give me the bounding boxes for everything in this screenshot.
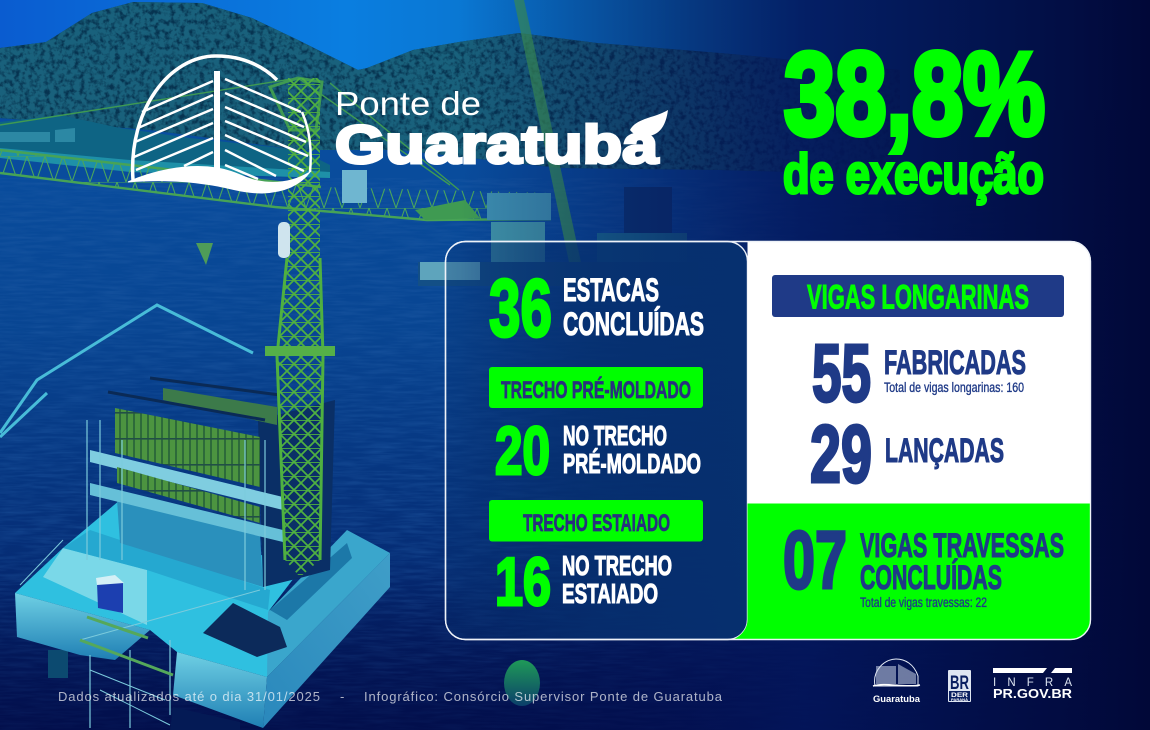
blue cabin (97, 583, 123, 613)
logo emblem: cable-stayed bridge (128, 56, 311, 193)
footer credits: Infográfico: Consórcio Supervisor Ponte de Guaratuba (364, 689, 723, 704)
stat: 20 no trecho pré-moldado (495, 413, 701, 489)
footer logo: Ponte de Guaratuba (873, 659, 921, 704)
stat: 07 vigas travessas concluídas: Total de vigas travessas: 22 (860, 595, 987, 610)
lower front wall (173, 652, 267, 728)
footer logo: DER Paraná: DER (951, 693, 969, 699)
label: trecho estaiado: TRECHO ESTAIADO (523, 510, 670, 537)
tower block and barge (624, 187, 672, 233)
formwork (115, 408, 260, 487)
tower lower face (117, 500, 263, 587)
stat: 36 estacas concluídas (489, 263, 704, 354)
stat: 55 fabricadas (812, 328, 1026, 419)
scaffold (87, 420, 265, 728)
hills (0, 0, 900, 180)
footer logo: DER Paraná: PARANÁ (951, 697, 969, 702)
headline percentage: 38,8% (784, 28, 1045, 159)
footer logo: Infra PR.GOV.BR: INFRA (993, 677, 1072, 689)
green beams (80, 617, 173, 675)
label: trecho pré-moldado (489, 367, 703, 408)
left wall (15, 593, 150, 660)
shore buildings (0, 115, 330, 178)
green buoy (504, 660, 540, 706)
bottom shading (0, 560, 1150, 730)
bands (90, 450, 283, 510)
panel: vigas longarinas (748, 241, 1091, 504)
project logo (128, 56, 668, 193)
stat: 55 fabricadas: FABRICADAS (884, 344, 1026, 382)
stat: 36 estacas concluídas: 36 (489, 263, 552, 354)
stat: 16 no trecho estaiado (495, 544, 672, 620)
main deck (15, 500, 300, 677)
logo wordmark: Ponte de: Ponte de (335, 85, 481, 122)
stat: 55 fabricadas: Total de vigas longarinas: 160 (884, 380, 1024, 395)
heading: vigas longarinas (772, 275, 1064, 317)
stat: 29 lançadas: LANÇADAS (885, 432, 1004, 470)
heading: vigas longarinas: VIGAS LONGARINAS (807, 278, 1029, 316)
tarp (203, 603, 287, 657)
crane apex and tower (270, 78, 322, 130)
stat: 16 no trecho estaiado: 16 (495, 544, 551, 620)
footer logo: Ponte de Guaratuba: Guaratuba (873, 694, 921, 704)
footer credits (58, 689, 723, 704)
panel outline (446, 242, 1090, 640)
stat: 20 no trecho pré-moldado: PRÉ-MOLDADO (563, 448, 701, 479)
stat: 29 lançadas: 29 (810, 409, 872, 500)
footer logo: Infra PR.GOV.BR (993, 668, 1073, 701)
logo wordmark: Guaratuba: Guaratuba (335, 115, 659, 175)
panel: estacas (446, 242, 748, 640)
stat: 20 no trecho pré-moldado: 20 (495, 413, 550, 489)
crane ties (0, 78, 459, 190)
stat: 16 no trecho estaiado: NO TRECHO (562, 550, 672, 581)
stat: 29 lançadas (810, 409, 1004, 500)
dark side behind crane tower (258, 400, 335, 587)
tower crane mast (265, 258, 335, 577)
footer credits: Dados atualizados até o dia 31/01/2025 (58, 689, 320, 704)
panel: vigas travessas (732, 504, 1091, 640)
concrete pump boom (0, 305, 253, 437)
stat: 36 estacas concluídas: CONCLUÍDAS (563, 306, 704, 342)
footer logo: Infra PR.GOV.BR: PR.GOV.BR (993, 686, 1073, 701)
stat: 07 vigas travessas concluídas: 07 (783, 515, 847, 606)
headline subtitle: de execução (783, 142, 1044, 205)
dark void (170, 707, 240, 730)
label: trecho pré-moldado: TRECHO PRÉ-MOLDADO (501, 376, 691, 404)
footer logo: DER Paraná (948, 670, 971, 702)
right wall (263, 553, 390, 728)
footer logo: DER Paraná: BR (950, 673, 969, 694)
label: trecho estaiado (489, 500, 703, 542)
main crane jib (0, 150, 551, 220)
stat: 07 vigas travessas concluídas (783, 515, 1064, 610)
stat: 55 fabricadas: 55 (812, 328, 871, 419)
stat: 20 no trecho pré-moldado: NO TRECHO (563, 420, 667, 451)
stat: 07 vigas travessas concluídas: CONCLUÍDAS (860, 559, 1002, 597)
footer credits: - (340, 689, 344, 704)
hook (196, 243, 213, 265)
platform and pier (15, 378, 390, 730)
second crane mast (514, 0, 582, 267)
logo leaf (630, 110, 668, 136)
stat: 36 estacas concluídas: ESTACAS (563, 272, 659, 308)
stat: 16 no trecho estaiado: ESTAIADO (562, 578, 658, 609)
right deck (200, 530, 390, 677)
